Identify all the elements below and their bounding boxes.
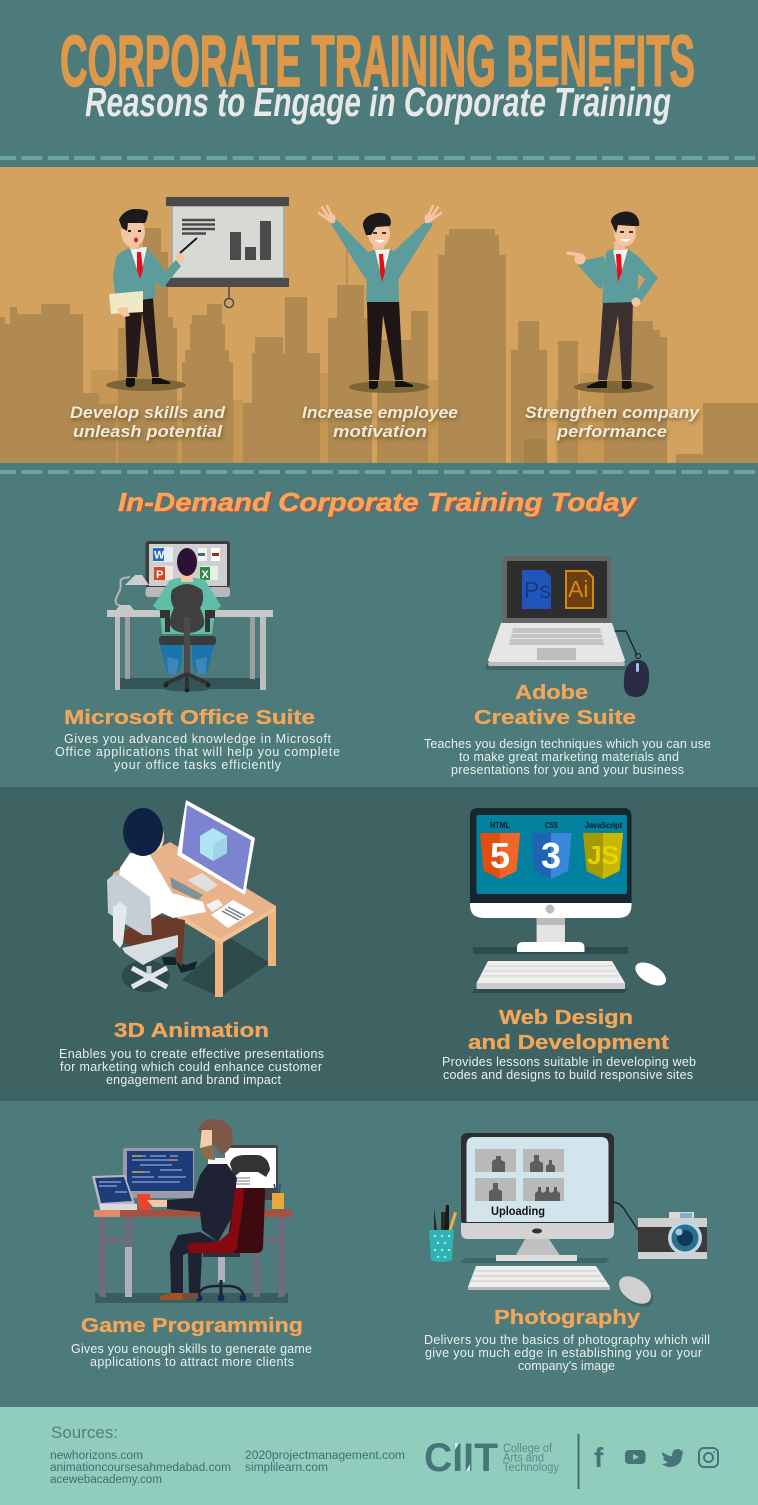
illustration: animator at desk [107, 800, 276, 997]
caption: increase motivation [302, 404, 458, 441]
icon: facebook: f [594, 1442, 604, 1473]
illustration: office desk: X [202, 569, 210, 581]
section heading: In-Demand Corporate Training Today [118, 487, 638, 517]
description [55, 732, 340, 772]
sources list: newhorizons.com [50, 1450, 143, 1462]
description: Teaches you design techniques which you can use [424, 737, 711, 751]
icon: css shield [531, 833, 572, 879]
description: codes and designs to build responsive sites [443, 1068, 693, 1082]
logo: CIIT: College of [503, 1443, 553, 1455]
illustration: desktop with code logos: JavaScript [585, 821, 622, 830]
logo: CIIT: Arts and [503, 1452, 544, 1464]
description: applications to attract more clients [90, 1355, 294, 1369]
panel: web design and development [442, 808, 696, 1082]
caption: increase motivation: Increase employee [302, 404, 458, 422]
icon: css shield: 3 [541, 835, 561, 876]
figure: pointing man [568, 212, 658, 393]
heading [474, 681, 636, 729]
logo: CIIT: CIIT [424, 1436, 498, 1480]
panel: adobe creative suite [424, 556, 711, 777]
description: Gives you enough skills to generate game [71, 1342, 312, 1356]
heading: Adobe [515, 681, 588, 704]
sources list: acewebacademy.com [50, 1474, 162, 1486]
sources list: animationcoursesahmedabad.com [50, 1462, 231, 1474]
heading: Game Programming [81, 1314, 303, 1337]
description: give you much edge in establishing you or your [425, 1346, 702, 1360]
description [424, 1333, 710, 1373]
illustration: desktop with code logos: CSS [545, 821, 559, 830]
illustration: laptop [486, 556, 649, 697]
illustration: laptop: Ps [524, 577, 551, 603]
icon: twitter [662, 1449, 684, 1467]
logo: CIIT: Technology [503, 1462, 559, 1474]
icon: instagram [699, 1448, 718, 1467]
presentation board [166, 197, 289, 308]
heading: Microsoft Office Suite [64, 706, 315, 729]
photo thumbnails [475, 1149, 564, 1201]
heading: and Development [468, 1031, 669, 1054]
figure: cheering man [319, 206, 441, 393]
heading: Web Design [499, 1006, 633, 1029]
panel: footer [0, 1407, 758, 1505]
icon: youtube [625, 1450, 646, 1464]
description: Provides lessons suitable in developing web [442, 1055, 696, 1069]
illustration: desktop with camera: Uploading [491, 1206, 545, 1218]
icon: html shield: 5 [490, 835, 510, 876]
figure: presenter [106, 209, 197, 391]
caption: increase motivation: motivation [333, 423, 427, 441]
description [424, 737, 711, 777]
caption: strengthen performance: performance [556, 423, 667, 441]
heading: 3D Animation [114, 1019, 269, 1042]
description: for marketing which could enhance customer [60, 1060, 322, 1074]
caption: strengthen performance [525, 404, 700, 441]
panel: microsoft office suite [55, 541, 340, 772]
description: Office applications that will help you complete [55, 745, 340, 759]
heading: Photography [494, 1306, 641, 1329]
icon: html shield [480, 833, 520, 879]
illustration: programmer at desk [92, 1119, 292, 1303]
sources list: simplilearn.com [245, 1462, 328, 1474]
description: presentations for you and your business [451, 763, 684, 777]
panel: photography [424, 1133, 710, 1373]
illustration: office desk: P [156, 569, 163, 581]
caption: strengthen performance: Strengthen company [525, 404, 700, 422]
description [71, 1342, 312, 1369]
heading: Creative Suite [474, 706, 636, 729]
caption: develop skills: Develop skills and [70, 404, 226, 422]
description: company's image [518, 1359, 615, 1373]
illustration: desktop with code logos: HTML [490, 821, 510, 830]
illustration: office desk [107, 541, 273, 692]
description [59, 1047, 324, 1087]
caption: develop skills [70, 404, 226, 441]
icon: javascript shield [583, 833, 623, 879]
caption: develop skills: unleash potential [73, 423, 222, 441]
panel: game programming [71, 1119, 312, 1369]
sources list [50, 1450, 405, 1486]
icon: javascript shield: JS [587, 840, 619, 870]
illustration: desktop with code logos [470, 808, 670, 993]
sources list: 2020projectmanagement.com [245, 1450, 405, 1462]
description: Delivers you the basics of photography which will [424, 1333, 710, 1347]
illustration: office desk: W [154, 550, 165, 562]
description: your office tasks efficiently [114, 758, 282, 772]
description [442, 1055, 696, 1082]
description: engagement and brand impact [106, 1073, 282, 1087]
sources heading: Sources: [51, 1423, 118, 1442]
panel: 3d animation [59, 800, 324, 1087]
icon: pencil cup [429, 1205, 457, 1262]
logo: CIIT [424, 1436, 559, 1480]
description: Enables you to create effective presentations [59, 1047, 324, 1061]
illustration: desktop with camera [429, 1133, 707, 1312]
title block [60, 22, 695, 125]
heading [468, 1006, 669, 1054]
city skyline [0, 228, 758, 463]
illustration: laptop: Ai [568, 576, 588, 602]
panel: benefits banner [0, 167, 758, 463]
description: Gives you advanced knowledge in Microsoft [64, 732, 332, 746]
icon: camera [638, 1212, 707, 1259]
description: to make great marketing materials and [459, 750, 679, 764]
